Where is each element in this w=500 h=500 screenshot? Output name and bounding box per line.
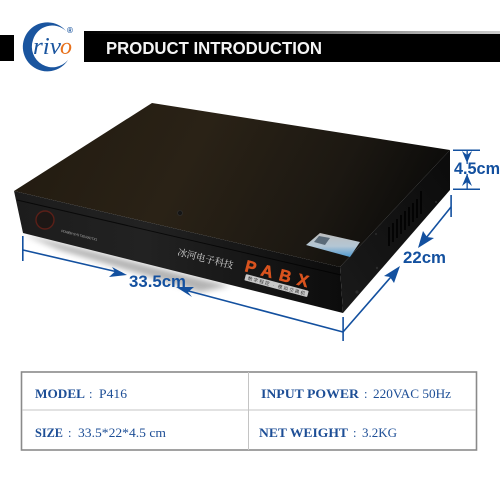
device: PABX box <box>14 103 450 313</box>
spec: model <box>35 387 127 401</box>
side screws <box>355 201 437 294</box>
spec: net weight <box>259 426 397 440</box>
PABX label: PABX <box>243 257 310 291</box>
dimension: height 4.5cm <box>453 150 500 190</box>
spec: model: MODEL <box>35 387 85 401</box>
spec: size: 33.5*22*4.5 cm <box>78 426 166 440</box>
spec: input power <box>261 387 451 401</box>
device top face <box>14 103 450 267</box>
device side face <box>340 150 450 313</box>
spec: input power: : <box>364 387 367 401</box>
sticker label <box>306 233 360 257</box>
PABX sub label: 数字程控 · 模拟交换机 <box>247 275 306 297</box>
logo: crivo: riv <box>33 34 61 60</box>
device shadow <box>23 234 230 292</box>
dimension: length 33.5cm <box>22 236 344 341</box>
spec: net weight: : <box>353 426 356 440</box>
spec: model: P416 <box>99 387 127 401</box>
spec: net weight: 3.2KG <box>362 426 397 440</box>
title: PRODUCT INTRODUCTION <box>106 38 322 58</box>
dimension: width 22cm <box>343 195 452 332</box>
header: left black block <box>0 35 14 61</box>
header: title bar <box>84 31 500 62</box>
spec: model: : <box>89 387 92 401</box>
logo: crivo <box>23 22 73 71</box>
power button <box>36 211 54 229</box>
spec: net weight: NET WEIGHT <box>259 426 349 440</box>
spec: input power: 220VAC 50Hz <box>373 387 451 401</box>
QR code <box>314 236 330 245</box>
spec: size <box>35 426 166 440</box>
logo: crivo: o <box>60 34 72 60</box>
spec: input power: INPUT POWER <box>261 387 360 401</box>
screw hole <box>178 210 182 216</box>
label: 4.5cm: 4.5cm <box>454 160 500 178</box>
lid seam <box>17 200 341 275</box>
brand text: 冰河电子科技 <box>176 246 235 272</box>
label: 22cm: 22cm <box>403 249 446 267</box>
spec: size: : <box>68 426 71 440</box>
label: 33.5cm: 33.5cm <box>129 273 186 291</box>
vent slots <box>389 191 421 246</box>
logo: crivo: ® <box>67 26 73 35</box>
spec table <box>22 372 476 450</box>
indicator labels: POWER SYS TX0 RX0 TX1 <box>61 229 98 242</box>
device front face <box>14 191 343 313</box>
spec: size: SIZE <box>35 426 63 440</box>
